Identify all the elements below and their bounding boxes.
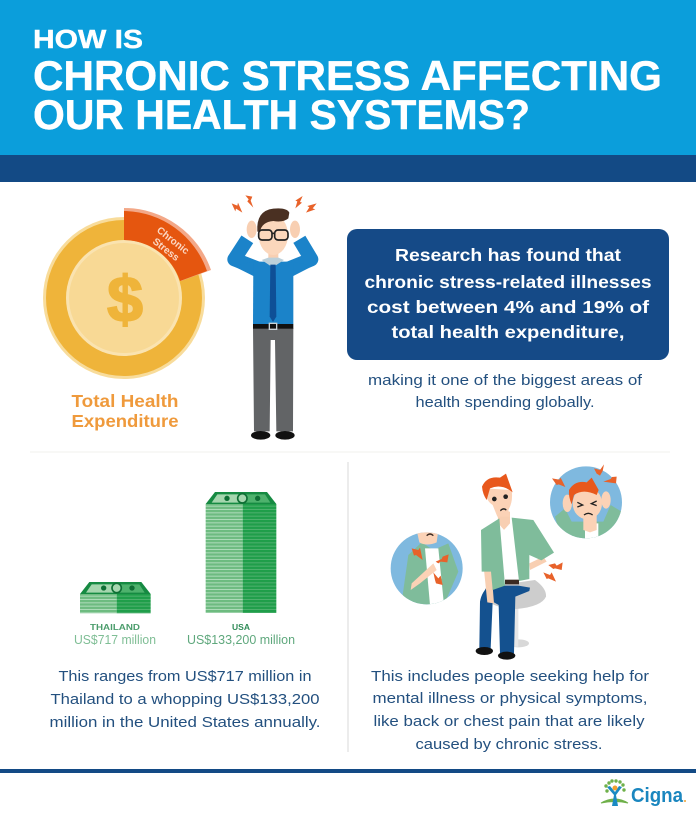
wordmark: Cigna [631,785,684,807]
inset: headache [550,464,622,542]
undershirt [499,523,518,581]
shoes [476,647,515,660]
lightning bolts [232,195,317,213]
title: OUR HEALTH SYSTEMS? [33,91,530,138]
tie [270,265,276,322]
pain bolts: back [543,562,563,582]
inset: chest pain [391,530,463,605]
text: cost range: million in the United States annually. [50,714,320,731]
illustration: man with symptoms [391,464,622,660]
text: symptoms: like back or chest pain that are likely [374,713,645,730]
hair [482,474,513,500]
belt [253,324,293,329]
callout: research finding: cost between 4% and 19% of [367,297,649,317]
donut label [72,391,179,431]
text: symptoms [371,668,649,753]
callout: research finding [347,229,669,360]
callout: research finding: Research has found that [395,245,621,265]
chart segment: chronic stress wedge: Stress [150,236,181,264]
text: symptoms: This includes people seeking help for [371,668,649,685]
trousers [253,328,293,431]
shirt [253,263,293,324]
donut label: Expenditure [72,411,179,431]
chart: total health expenditure donut [43,208,211,379]
glasses [259,230,288,240]
jeans [479,586,530,653]
label: usa: USA [232,622,250,632]
callout: research finding: chronic stress-related illnesses [364,272,652,292]
text: biggest areas of spending [368,372,643,411]
illustration: stressed man [232,195,317,440]
arms [234,239,311,269]
title: HOW IS [33,24,143,54]
label: thailand: US$717 million [74,633,156,647]
neck and collar [268,247,278,262]
callout: research finding: total health expenditure, [392,322,624,342]
hair [257,208,289,232]
hands [247,221,300,238]
label: thailand [74,622,156,647]
header banner [0,0,696,182]
text: biggest areas of spending: health spending globally. [416,394,594,411]
text: symptoms: mental illness or physical symptoms, [372,690,648,707]
usa stack [206,492,276,613]
label: usa [187,622,295,647]
arms skin [484,557,547,603]
donut label: Total Health [72,391,178,411]
title: CHRONIC STRESS AFFECTING [33,52,662,99]
stool [485,580,546,647]
chart segment: chronic stress wedge [124,208,211,281]
neck [497,512,510,530]
label: thailand: THAILAND [90,622,140,632]
text: symptoms: caused by chronic stress. [416,736,602,753]
logo: cigna [601,779,686,807]
text: cost range: Thailand to a whopping US$133,200 [50,691,320,708]
shoes [251,431,295,440]
chart segment: chronic stress wedge: Chronic [154,225,191,257]
icon: cigna tree [601,779,628,806]
chart: money stacks [80,492,276,613]
face [492,494,508,511]
text: biggest areas of spending: making it one of the biggest areas of [368,372,643,389]
title [33,24,662,138]
cardigan [481,518,554,590]
footer rule [0,769,696,773]
belt [505,580,519,584]
text: cost range: This ranges from US$717 million in [58,668,312,685]
thailand stack [80,582,151,613]
head [485,488,512,517]
label: usa: US$133,200 million [187,633,295,647]
head [259,215,288,255]
icon: dollar sign: $ [107,263,143,335]
text: cost range [50,668,320,731]
